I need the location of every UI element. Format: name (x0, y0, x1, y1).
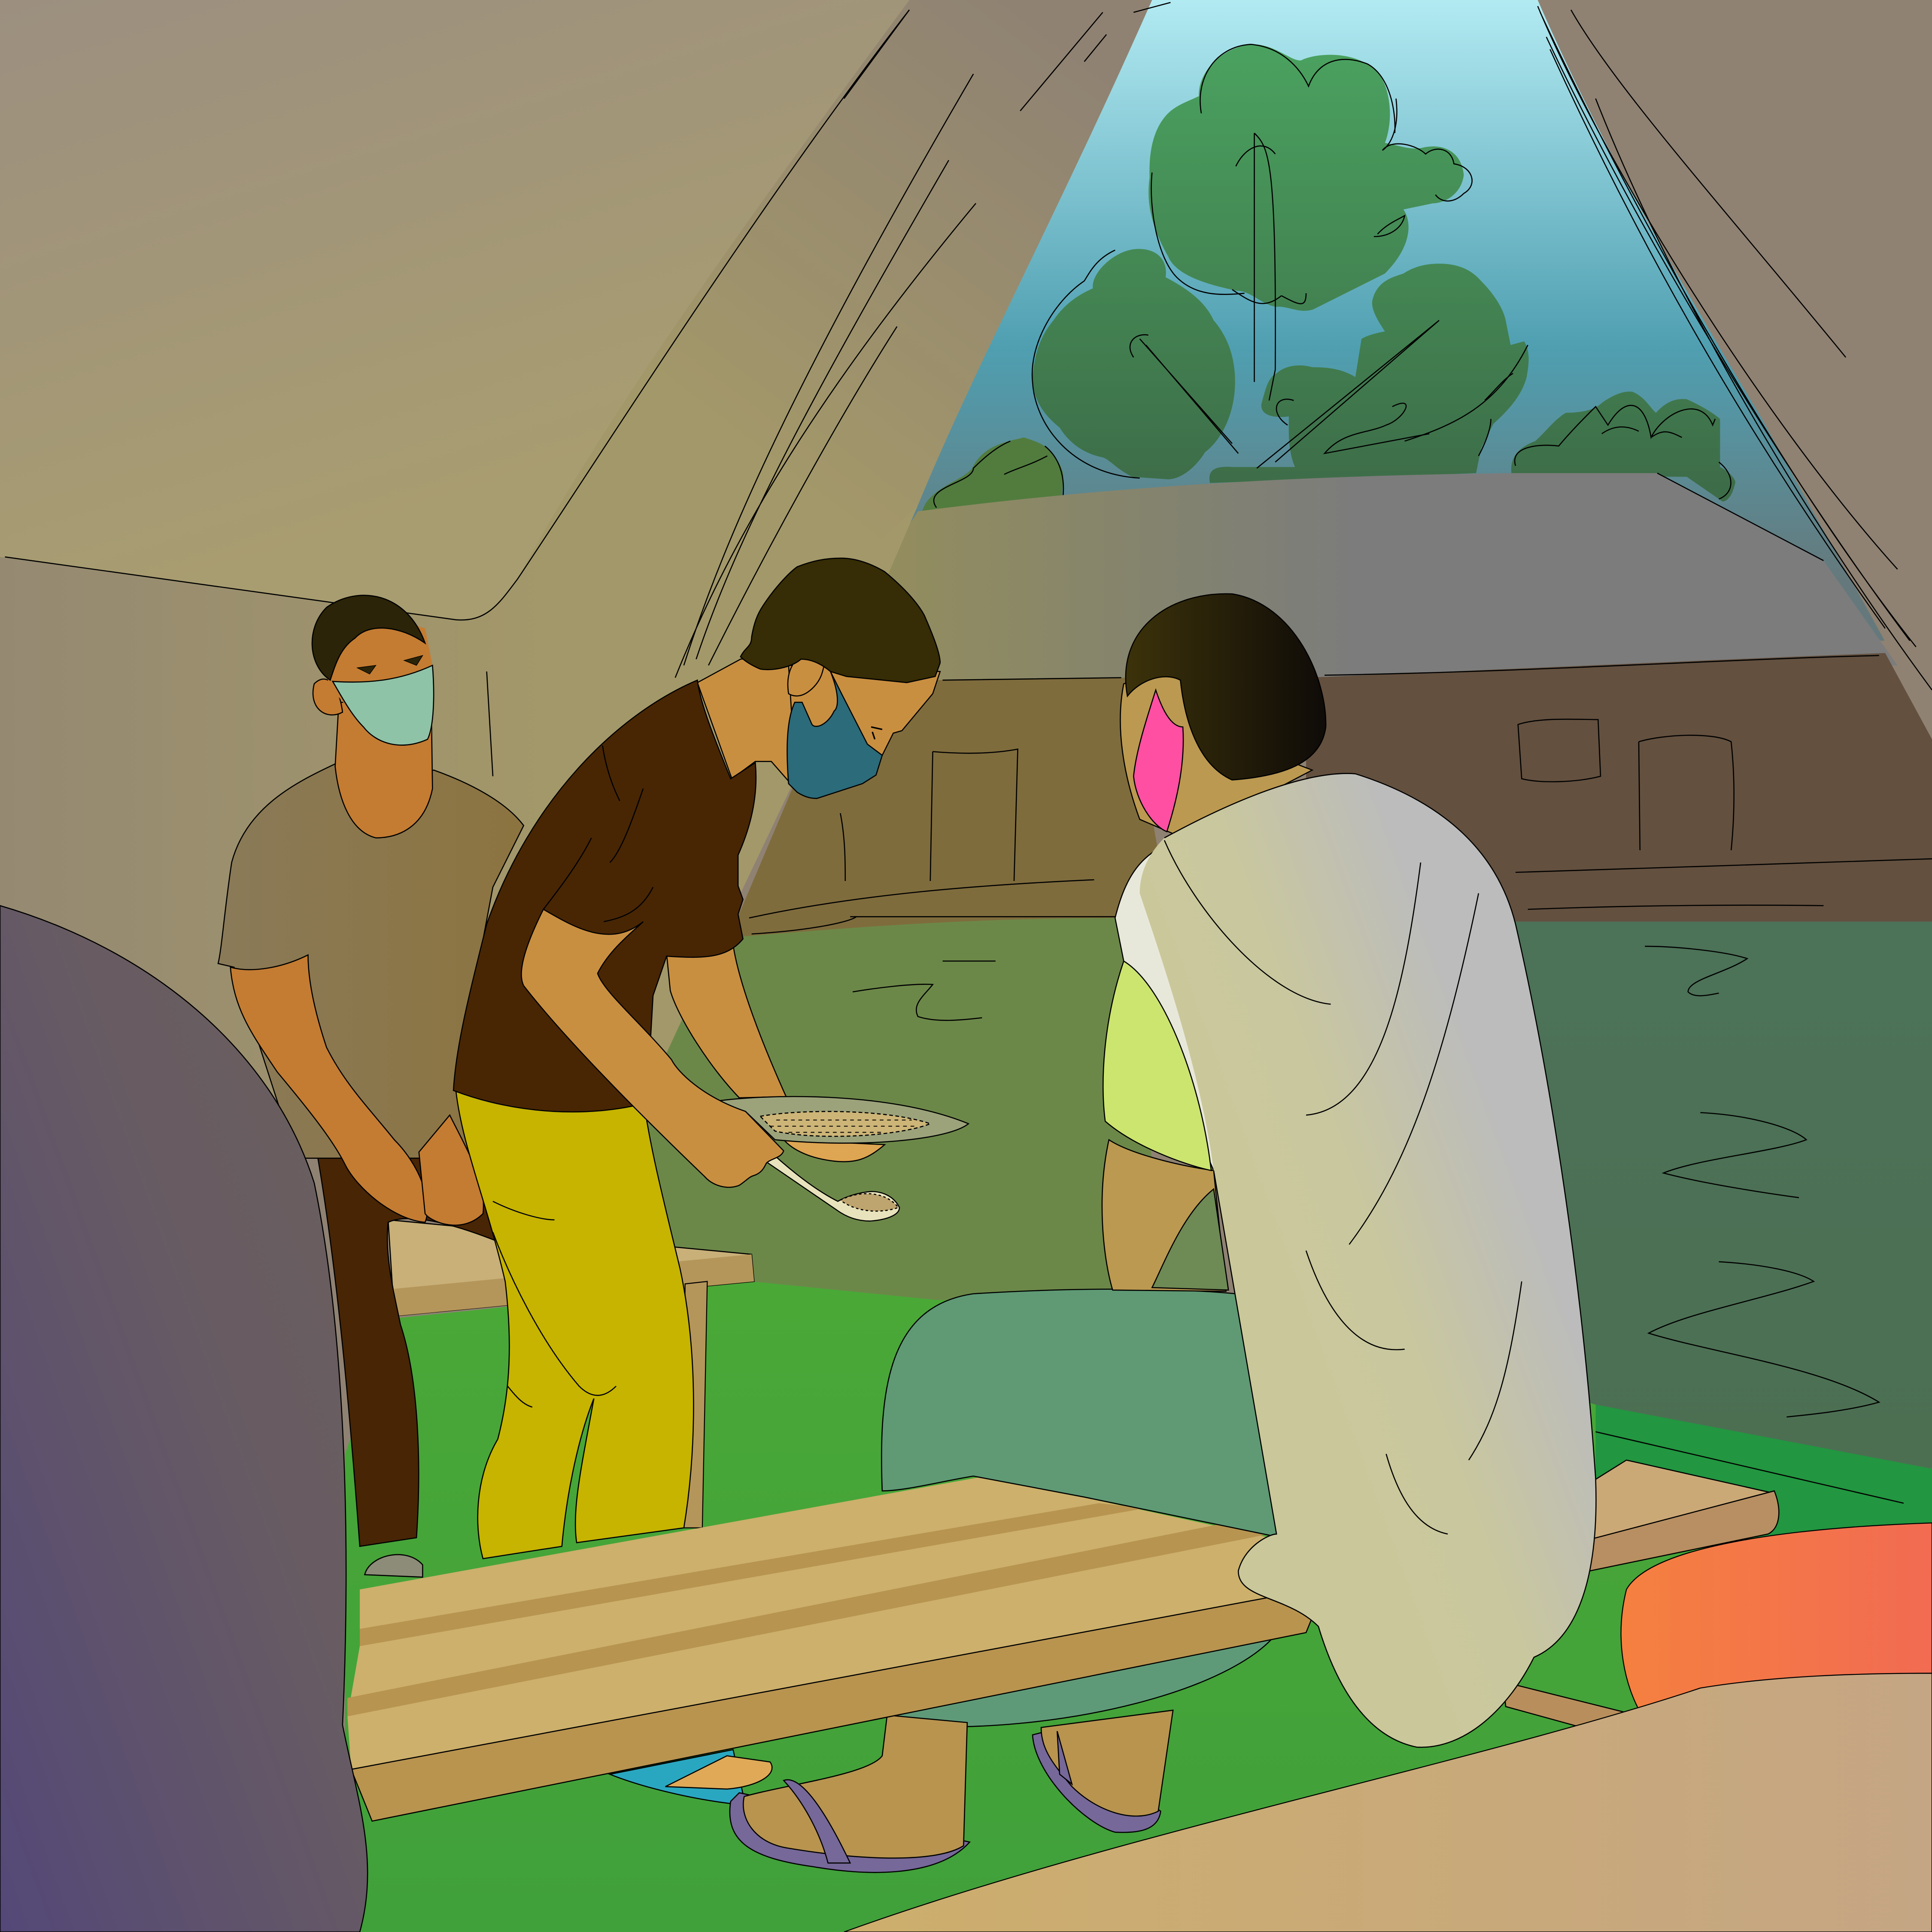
bench top surface (347, 1476, 1324, 1769)
shawl outline (1164, 774, 1596, 1747)
person: standing left (218, 595, 524, 1577)
tent: right panel (1538, 0, 1932, 729)
tent fold lines (5, 3, 1932, 776)
trees (922, 44, 1735, 514)
building details (749, 656, 1932, 934)
inner garment (1152, 1189, 1228, 1290)
eye (871, 727, 882, 739)
tent: left body (0, 0, 1152, 1109)
building wall: right (1306, 653, 1932, 922)
face (328, 623, 434, 734)
table front (394, 1255, 754, 1316)
ground: dark right (1503, 922, 1932, 1469)
far arm (667, 945, 786, 1098)
sandal under bench (610, 1750, 745, 1805)
bush: right (1511, 392, 1735, 501)
foot under bench (665, 1756, 772, 1789)
hair (312, 595, 425, 680)
bench right end front (1587, 1491, 1779, 1571)
tree: right (1209, 264, 1529, 483)
grass (345, 1282, 1932, 1932)
tent: top flap (0, 0, 909, 620)
building wall: left (727, 677, 1170, 942)
plate (714, 1097, 969, 1143)
hair (741, 558, 940, 683)
hand under plate (784, 1140, 885, 1162)
white sleeve area (1115, 838, 1232, 1170)
eyes (357, 656, 422, 674)
tree: left (1033, 249, 1235, 479)
sandal (1033, 1731, 1160, 1832)
foreground: sand-coloured figure (844, 1673, 1932, 1932)
bench legs (1503, 1682, 1626, 1740)
face (1120, 665, 1312, 838)
table leg (684, 1282, 707, 1528)
shawl fill (1140, 774, 1596, 1747)
person: serving woman (453, 558, 969, 1558)
foreground: purple figure (0, 905, 368, 1932)
arm (231, 955, 428, 1222)
table top (388, 1220, 754, 1316)
foreground: orange garment (1621, 1523, 1932, 1720)
tree: big centre (1148, 44, 1464, 311)
building roof (850, 473, 1898, 690)
sandal strap (1057, 1731, 1072, 1784)
dark gap two (347, 1522, 1269, 1716)
near arm and hand (521, 909, 784, 1187)
foot (1041, 1710, 1173, 1816)
neck (697, 653, 813, 789)
food on spoon (840, 1194, 898, 1211)
yellow trousers (456, 1091, 693, 1558)
bench right end top (1577, 1460, 1774, 1540)
shawl folds (1164, 840, 1522, 1534)
seated woman (881, 594, 1596, 1747)
hand (419, 1115, 483, 1225)
t-shirt (453, 680, 756, 1112)
trouser folds (493, 1201, 616, 1407)
bush: left (922, 437, 1063, 514)
yellow-green shirt (1103, 961, 1211, 1170)
dark gap one (360, 1503, 1146, 1646)
hair (1126, 594, 1326, 780)
face mask (333, 665, 434, 745)
green wrap over thighs (881, 1289, 1282, 1538)
trousers (318, 1158, 499, 1546)
face mask (787, 671, 882, 799)
foot (743, 1715, 967, 1858)
tent: upper right shading (370, 0, 1152, 616)
sky (863, 0, 1885, 641)
sandal sole (730, 1793, 970, 1872)
ear (788, 648, 826, 696)
seated woman: near foot with sandal (730, 1715, 970, 1872)
ear (313, 679, 343, 715)
spoon (754, 1136, 899, 1221)
pink mask (1133, 690, 1183, 832)
seated woman: far foot with sandal (1033, 1710, 1173, 1832)
table behind (388, 1220, 754, 1528)
face (789, 665, 940, 764)
neck (335, 702, 432, 838)
grass: far right darker strip (1596, 1405, 1932, 1602)
ground: olive middle (641, 918, 1170, 1306)
bench (347, 1460, 1779, 1821)
shoe (365, 1555, 422, 1577)
sandal strap (784, 1780, 850, 1863)
arm (1102, 1140, 1226, 1291)
bench front (351, 1587, 1324, 1821)
food texture (770, 1120, 918, 1132)
t-shirt (218, 764, 524, 1158)
ground scribbles (853, 946, 1879, 1417)
shirt folds (544, 745, 653, 922)
tree outlines (934, 44, 1731, 507)
lower pants of seated woman (887, 1626, 1282, 1727)
food on plate (760, 1112, 930, 1136)
